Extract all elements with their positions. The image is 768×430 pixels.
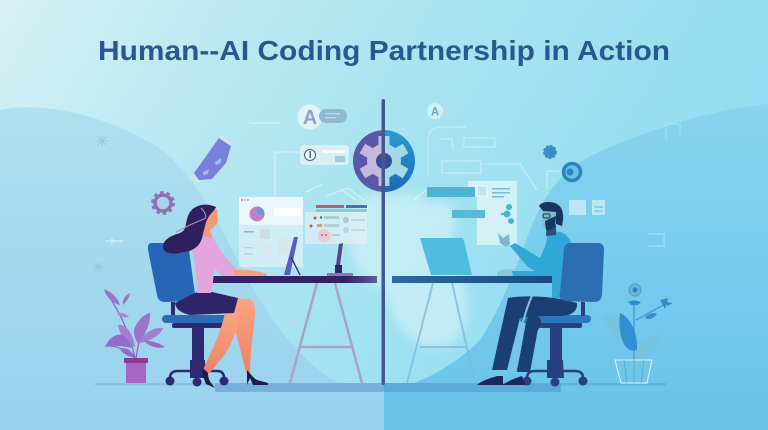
panel: status board <box>305 205 367 244</box>
beard <box>545 216 556 230</box>
chair stem <box>550 328 562 362</box>
connector lines <box>428 127 562 190</box>
icon: sparkle left top <box>96 135 108 147</box>
desk legs <box>407 283 475 383</box>
person: man <box>477 202 604 385</box>
hub <box>376 153 392 169</box>
shoe back <box>247 370 268 385</box>
pie chart <box>250 206 265 222</box>
icon: letter A badge <box>298 104 347 130</box>
head <box>203 209 218 238</box>
right desk <box>392 238 552 383</box>
left decorative icons <box>92 135 233 273</box>
torso <box>512 231 573 298</box>
AI ghost shape <box>349 195 468 347</box>
pot <box>124 358 148 363</box>
card: small gauge <box>301 146 348 164</box>
desk top <box>392 276 552 283</box>
desk top <box>207 276 377 283</box>
floor line <box>95 383 666 392</box>
under seat bar <box>528 322 582 328</box>
chair back <box>560 243 604 302</box>
raised hand <box>498 233 510 247</box>
laptop <box>420 238 472 275</box>
plant right <box>602 284 673 383</box>
thin chair arm <box>513 296 532 370</box>
hair <box>163 205 216 254</box>
left half disc <box>353 130 382 192</box>
pot <box>615 360 652 383</box>
gear disc <box>353 130 415 192</box>
icon: sparkle right <box>631 150 644 166</box>
headset <box>176 208 206 232</box>
seat <box>162 315 234 323</box>
centre divider <box>342 99 426 385</box>
torso <box>192 233 236 293</box>
right half disc <box>385 130 415 192</box>
plant left <box>104 289 165 383</box>
panel: document <box>468 181 517 245</box>
icon: purple gear <box>152 192 174 214</box>
left desk <box>207 237 377 383</box>
hand <box>234 270 267 276</box>
person: woman <box>163 205 268 388</box>
skirt <box>175 292 238 315</box>
icon: small white cards <box>569 200 605 215</box>
icon: blue ring gear <box>564 164 580 180</box>
hand on desk <box>497 269 516 276</box>
laptop <box>284 237 300 275</box>
glasses <box>543 214 550 218</box>
icon: purple cartridge <box>191 136 233 183</box>
icon: sparkle left bottom <box>92 261 104 273</box>
seat <box>520 315 591 323</box>
chair stem and base <box>172 323 225 328</box>
divider bar <box>382 99 385 385</box>
hair <box>539 202 563 226</box>
left chair <box>148 243 234 386</box>
lamp / monitor arm <box>327 243 353 276</box>
panel: dashboard <box>239 197 303 267</box>
connector lines <box>250 123 364 200</box>
chair back <box>148 243 195 302</box>
icon: letter A badge: A <box>303 107 317 129</box>
back leg <box>232 298 255 373</box>
front leg <box>203 311 240 375</box>
title: Human--AI Coding Partnership in Action <box>98 35 670 66</box>
raised arm <box>510 240 552 272</box>
right floating interface <box>427 103 680 246</box>
icon: cross mark <box>105 238 123 244</box>
outline boxes <box>648 124 680 246</box>
connector chevrons below gear <box>342 190 426 200</box>
shoe front <box>202 367 215 388</box>
right chair <box>520 302 591 386</box>
circuit box <box>442 161 481 173</box>
icon: letter A circle <box>427 103 443 119</box>
left floating interface <box>239 104 367 267</box>
code bars <box>427 187 485 218</box>
desk legs <box>290 283 362 383</box>
icon: blue cog <box>544 146 556 158</box>
legs <box>492 296 577 370</box>
neck and head <box>546 219 556 236</box>
icon: letter A circle: A <box>431 106 439 118</box>
shoes <box>477 376 503 385</box>
